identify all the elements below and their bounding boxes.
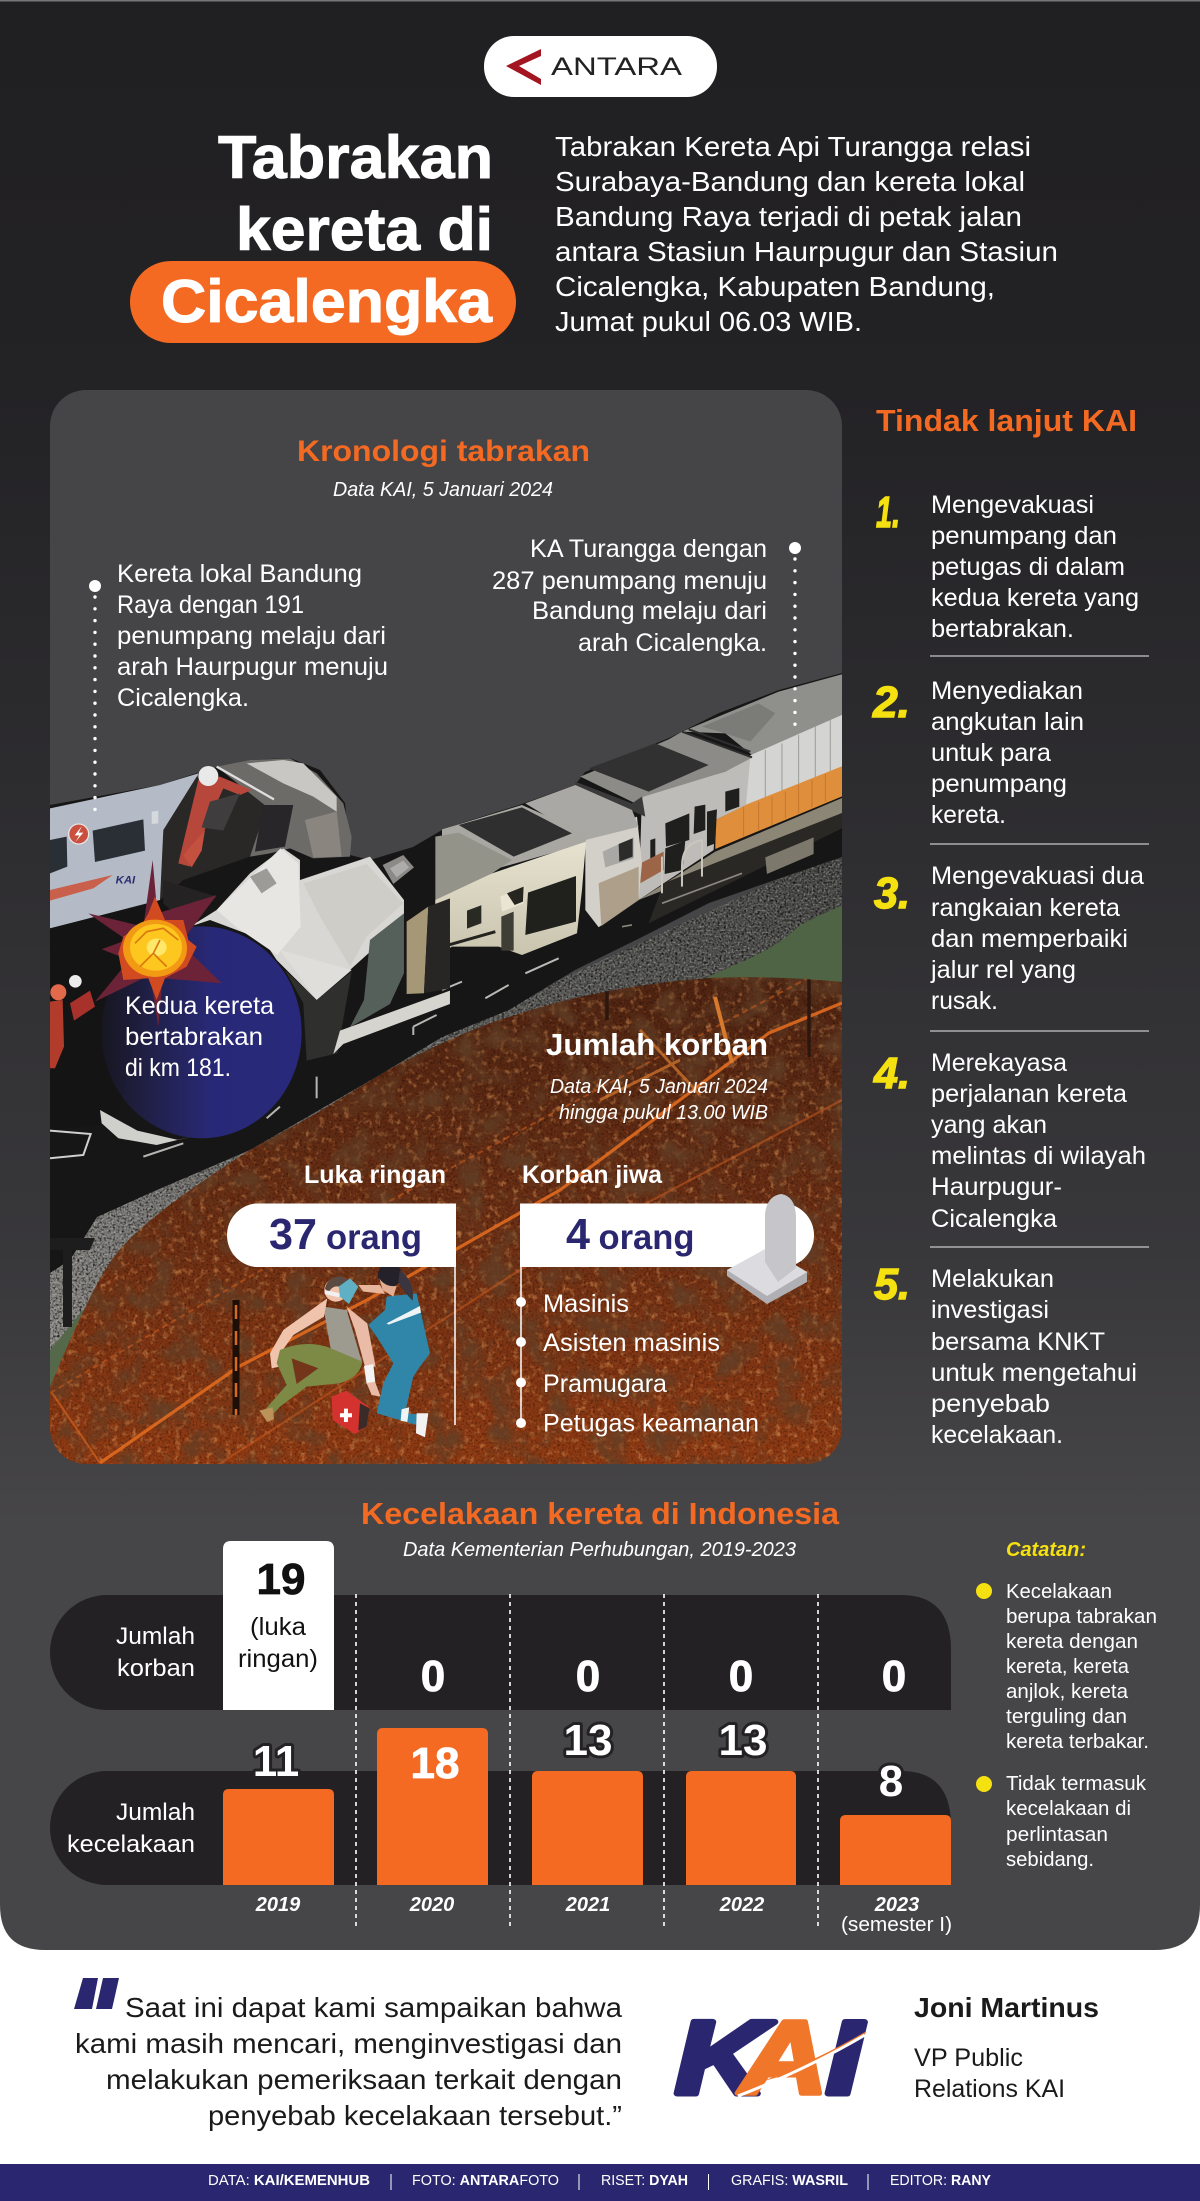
- quote: Saat ini dapat kami sampaikan bahwa: [125, 1992, 622, 2023]
- values: korban 2020-2023: [421, 1652, 906, 1701]
- intro paragraph: [555, 131, 1058, 337]
- passenger car and crash: [50, 758, 450, 1158]
- item 3: rusak.: [931, 987, 998, 1015]
- icon: tombstone: [727, 1194, 807, 1304]
- values: kecelakaan: 13: [719, 1716, 767, 1765]
- stat: Korban jiwa: [516, 1161, 814, 1438]
- item 2: angkutan lain: [931, 708, 1084, 736]
- nurse: [358, 1263, 430, 1437]
- footer credits bar: EDITOR: RANY: [890, 2172, 991, 2189]
- logo: KAI: K: [675, 2000, 775, 2116]
- row label: Jumlah korban: Jumlah: [116, 1623, 195, 1650]
- title: Tabrakan: [218, 124, 493, 191]
- callout: Kedua kereta bertabrakan: di km 181.: [125, 1054, 231, 1082]
- item 1: petugas di dalam: [931, 553, 1125, 581]
- stat: Luka ringan: [227, 1161, 456, 1425]
- callout: kereta lokal Bandung Raya: [89, 560, 388, 812]
- explosion: [88, 860, 222, 1027]
- item 5: kecelakaan.: [931, 1421, 1063, 1449]
- heading: Jumlah korban: hingga pukul 13.00 WIB: [559, 1102, 768, 1124]
- bar: korban 2019: [223, 1541, 334, 1710]
- value: 19 luka ringan: ringan): [238, 1645, 318, 1673]
- speaker: Joni Martinus: Joni Martinus: [914, 1992, 1099, 2023]
- locomotives: [435, 673, 845, 998]
- heading: Jumlah korban: Data KAI, 5 Januari 2024: [550, 1076, 768, 1098]
- title: [130, 124, 516, 343]
- orange band: [715, 765, 845, 849]
- values: korban 2020-2023: 0: [421, 1652, 445, 1701]
- intro paragraph: Surabaya-Bandung dan kereta lokal: [555, 166, 1025, 197]
- footer credits bar: [0, 2164, 1200, 2201]
- item 4: melintas di wilayah: [931, 1142, 1146, 1170]
- upper debris: [217, 758, 352, 858]
- notes: Catatan: perlintasan: [1006, 1824, 1108, 1846]
- values: kecelakaan: 13: [564, 1716, 612, 1765]
- callout: kereta lokal Bandung Raya: penumpang melaju dari: [117, 622, 386, 650]
- speaker: Joni Martinus: Relations KAI: [914, 2075, 1065, 2103]
- middle hood: [442, 805, 586, 870]
- item 4: 4.: [873, 1049, 910, 1098]
- callout: KA Turangga: 287 penumpang menuju: [492, 567, 767, 595]
- item 1: [876, 488, 1149, 656]
- item 5: penyebab: [931, 1390, 1050, 1418]
- notes: Catatan: kereta, kereta: [1006, 1656, 1130, 1678]
- intro paragraph: Bandung Raya terjadi di petak jalan: [555, 201, 1022, 232]
- item 3: dan memperbaiki: [931, 925, 1128, 953]
- values: korban 2020-2023: 0: [576, 1652, 600, 1701]
- callout: KA Turangga: Bandung melaju dari: [532, 597, 767, 625]
- source: Kementerian Perhubungan: Data Kementerian Perhubungan, 2019-2023: [403, 1539, 796, 1561]
- item 5: untuk mengetahui: [931, 1359, 1137, 1387]
- rear hood roof: [682, 673, 845, 755]
- item 1: penumpang dan: [931, 522, 1117, 550]
- item 4: Merekayasa: [931, 1049, 1067, 1077]
- cab side grey: [639, 757, 750, 900]
- x axis: years: 2022: [719, 1894, 764, 1916]
- x axis: years: 2021: [565, 1894, 610, 1916]
- row label: Jumlah korban: [116, 1623, 195, 1682]
- row band: Jumlah kecelakaan: [50, 1771, 951, 1885]
- callout: kereta lokal Bandung Raya: arah Haurpugur menuju: [117, 653, 388, 681]
- dark below car: [50, 920, 82, 928]
- item 4: Haurpugur-: [931, 1173, 1062, 1201]
- train silhouette: [50, 673, 842, 1273]
- callout: KA Turangga: KA Turangga dengan: [530, 535, 767, 563]
- item 3: 3.: [874, 869, 910, 918]
- first aid kit: [332, 1391, 369, 1434]
- list: korban jiwa: Masinis: [543, 1290, 629, 1318]
- rescue workers: [50, 975, 95, 1068]
- heading: Kecelakaan kereta di Indonesia: Kecelakaan kereta di Indonesia: [361, 1496, 840, 1531]
- heading: Jumlah korban: Jumlah korban: [546, 1027, 768, 1062]
- footer credits bar: GRAFIS: WASRIL: [731, 2172, 848, 2189]
- title: Cicalengka: [161, 268, 493, 335]
- stat: Korban jiwa: 4: [566, 1210, 591, 1259]
- x axis: years: 2023: [874, 1894, 919, 1916]
- notes: Catatan: Catatan:: [1006, 1539, 1086, 1561]
- quote: [74, 1978, 622, 2131]
- intro paragraph: Jumat pukul 06.03 WIB.: [555, 306, 862, 337]
- item 2: kereta.: [931, 801, 1006, 829]
- value: 19 luka ringan: [238, 1555, 318, 1673]
- x axis: years: 2020: [409, 1894, 454, 1916]
- logo: ANTARA: ANTARA: [551, 53, 682, 81]
- title: kereta di: [236, 196, 493, 263]
- item 5: investigasi: [931, 1296, 1049, 1324]
- trackside post: [63, 1238, 95, 1327]
- panel: Tindak lanjut KAI: [872, 403, 1149, 1449]
- notes: Catatan: berupa tabrakan: [1006, 1606, 1157, 1628]
- values: korban 2020-2023: 0: [882, 1652, 906, 1701]
- item 3: rangkaian kereta: [931, 894, 1120, 922]
- footer credits bar: RISET: DYAH: [601, 2172, 688, 2189]
- values: kecelakaan: 8: [879, 1757, 903, 1806]
- item 5: bersama KNKT: [931, 1328, 1105, 1356]
- value: 19 luka ringan: (luka: [250, 1613, 306, 1641]
- front hood: [435, 833, 512, 903]
- notes: Catatan: Tidak termasuk: [1006, 1773, 1147, 1795]
- item 2: [872, 677, 1149, 844]
- stat: Korban jiwa: orang: [598, 1218, 694, 1257]
- item 1: kedua kereta yang: [931, 584, 1139, 612]
- item 4: perjalanan kereta: [931, 1080, 1127, 1108]
- item 4: yang akan: [931, 1111, 1047, 1139]
- logo: KAI: [675, 2000, 865, 2116]
- callout: kereta lokal Bandung Raya: Raya dengan 191: [117, 591, 304, 619]
- stat: Luka ringan: 37: [269, 1210, 317, 1259]
- gravel and grass: [50, 905, 780, 1350]
- item 4: Cicalengka: [931, 1205, 1057, 1233]
- intro paragraph: Cicalengka, Kabupaten Bandung,: [555, 271, 995, 302]
- intro paragraph: Tabrakan Kereta Api Turangga relasi: [555, 131, 1031, 162]
- list: korban jiwa: Petugas keamanan: [543, 1410, 759, 1438]
- bars: kecelakaan per tahun: [223, 1728, 951, 1885]
- item 2: penumpang: [931, 770, 1067, 798]
- values: korban 2020-2023: 0: [729, 1652, 753, 1701]
- stat: Luka ringan: orang: [326, 1218, 422, 1257]
- notes: Catatan: sebidang.: [1006, 1849, 1094, 1871]
- walkway and frame: [639, 797, 845, 900]
- stat: Korban jiwa: Korban jiwa: [522, 1161, 663, 1189]
- stat: Luka ringan: Luka ringan: [304, 1161, 446, 1189]
- passenger car: [50, 773, 198, 928]
- x axis: years: (semester I): [841, 1914, 952, 1936]
- item 4: [873, 1049, 1149, 1247]
- list: korban jiwa: Asisten masinis: [543, 1329, 720, 1357]
- rust coloured ground overlay: [50, 960, 842, 1470]
- item 3: Mengevakuasi dua: [931, 862, 1144, 890]
- item 5: Melakukan: [931, 1265, 1054, 1293]
- ribbed side: [745, 713, 845, 807]
- blue callout circle: [102, 926, 302, 1138]
- item 3: [874, 862, 1149, 1031]
- logo: ANTARA: [484, 36, 717, 97]
- notes: Catatan: [976, 1539, 1157, 1871]
- row band: Jumlah korban: [50, 1595, 951, 1710]
- cream side: [435, 842, 586, 957]
- illustration: nurse treating injured passenger: [259, 1263, 430, 1437]
- footer credits bar: DATA: KAI/KEMENHUB: [208, 2172, 370, 2189]
- heading: Jumlah korban: [546, 1027, 768, 1124]
- notes: Catatan: kereta terbakar.: [1006, 1731, 1149, 1753]
- quote: penyebab kecelakaan tersebut.”: [208, 2100, 622, 2131]
- notes: Catatan: terguling dan: [1006, 1706, 1127, 1728]
- callout: KA Turangga: [492, 535, 801, 728]
- item 3: jalur rel yang: [930, 956, 1076, 984]
- notes: Catatan: kecelakaan di: [1006, 1798, 1131, 1820]
- values: kecelakaan: 18: [411, 1739, 459, 1788]
- item 5: 5.: [874, 1260, 910, 1309]
- x axis: years: 2019: [255, 1894, 301, 1916]
- item 1: 1.: [876, 488, 900, 537]
- dashed separators: [356, 1594, 818, 1930]
- intro paragraph: antara Stasiun Haurpugur dan Stasiun: [555, 236, 1058, 267]
- notes: Catatan: kereta dengan: [1006, 1631, 1138, 1653]
- logo: KAI: A: [736, 2000, 828, 2116]
- callout: Kedua kereta bertabrakan: Kedua kereta: [125, 992, 274, 1020]
- red cab: [178, 777, 252, 867]
- cab windows: [650, 788, 739, 874]
- row label: Jumlah kecelakaan: Jumlah: [116, 1799, 195, 1826]
- undercarriage highlights: [442, 958, 559, 998]
- heading: Kronologi tabrakan: Kronologi tabrakan: [297, 435, 590, 468]
- notes: Catatan: anjlok, kereta: [1006, 1681, 1129, 1703]
- chart: korban dan kecelakaan 2019-2023: [50, 1541, 952, 1936]
- row label: Jumlah kecelakaan: [67, 1799, 195, 1858]
- dark wreck backdrop: [160, 777, 273, 900]
- patient: [259, 1276, 381, 1422]
- heading: Tindak lanjut KAI: Tindak lanjut KAI: [876, 403, 1137, 438]
- values: kecelakaan: [253, 1716, 903, 1806]
- quote: melakukan pemeriksaan terkait dengan: [106, 2064, 622, 2095]
- passenger car and crash: KAI: [116, 874, 136, 886]
- callout: kereta lokal Bandung Raya: Kereta lokal Bandung: [117, 560, 362, 588]
- list: korban jiwa: [516, 1267, 759, 1438]
- row label: Jumlah kecelakaan: kecelakaan: [67, 1831, 195, 1858]
- panel: kronologi tabrakan: [50, 390, 845, 1470]
- front cab: [585, 817, 642, 927]
- list: korban jiwa: Pramugara: [543, 1370, 667, 1398]
- speaker: Joni Martinus: [914, 1992, 1099, 2103]
- source: Kronologi: Data KAI, 5 Januari 2024: [333, 479, 553, 501]
- footer credits bar: FOTO: ANTARAFOTO: [412, 2172, 559, 2189]
- callout: kereta lokal Bandung Raya: Cicalengka.: [117, 684, 249, 712]
- notes: Catatan: Kecelakaan: [1006, 1581, 1112, 1603]
- logo: KAI: I: [826, 2000, 865, 2116]
- icon: quotation mark: [74, 1978, 119, 2009]
- speaker: Joni Martinus: VP Public: [914, 2044, 1023, 2072]
- photo: collided trains on railway: [50, 673, 845, 1470]
- row label: Jumlah korban: korban: [117, 1655, 195, 1682]
- values: kecelakaan: 11: [253, 1737, 299, 1786]
- callout: Kedua kereta bertabrakan: bertabrakan: [125, 1023, 263, 1051]
- item 1: bertabrakan.: [931, 615, 1074, 643]
- crushed white locomotive: [190, 848, 404, 1000]
- roof and dark panel: [580, 732, 753, 803]
- item 5: [874, 1260, 1137, 1449]
- callout: KA Turangga: arah Cicalengka.: [578, 629, 767, 657]
- value: 19 luka ringan: 19: [257, 1555, 305, 1604]
- lower debris: [100, 1110, 192, 1145]
- item 2: Menyediakan: [931, 677, 1083, 705]
- x axis: years: [255, 1894, 952, 1936]
- callout: Kedua kereta bertabrakan: [125, 992, 274, 1082]
- quote: kami masih mencari, menginvestigasi dan: [75, 2028, 622, 2059]
- item 2: 2.: [872, 678, 910, 727]
- item 1: Mengevakuasi: [931, 491, 1094, 519]
- item 2: untuk para: [931, 739, 1051, 767]
